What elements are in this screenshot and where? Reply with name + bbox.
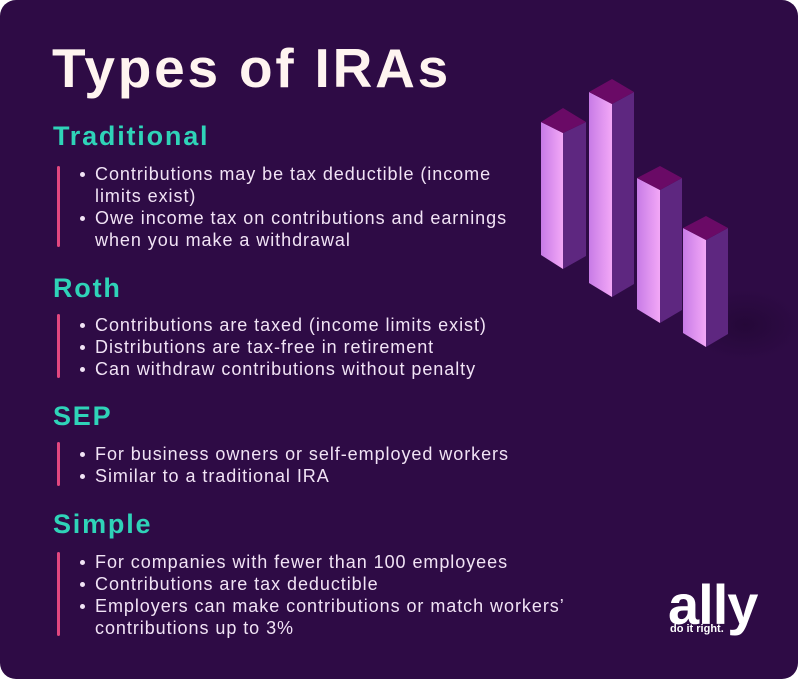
bar 3 <box>637 166 682 323</box>
bar 4 <box>683 216 728 347</box>
list: Simple <box>80 552 565 638</box>
list: Traditional: when you make a withdrawal <box>95 230 351 250</box>
logo: ally: ally <box>668 573 757 636</box>
list: Traditional: Owe income tax on contributions and earnings <box>95 208 507 228</box>
accent bar: Simple <box>57 552 60 636</box>
heading: Traditional: Traditional <box>53 121 209 151</box>
heading: SEP: SEP <box>53 401 112 431</box>
list: Roth <box>80 315 487 379</box>
list: Roth: Distributions are tax-free in retirement <box>95 337 434 357</box>
heading: Roth: Roth <box>53 273 122 303</box>
list: Simple: contributions up to 3% <box>95 618 294 638</box>
list: Roth: Can withdraw contributions without penalty <box>95 359 476 379</box>
list: Traditional: Contributions may be tax deductible (income <box>95 164 491 184</box>
accent bar: Traditional <box>57 166 60 247</box>
logo: ally: do it right. <box>670 623 724 635</box>
list: SEP <box>80 444 509 486</box>
bar 1 <box>541 108 586 269</box>
list: Traditional: limits exist) <box>95 186 196 206</box>
accent bar: SEP <box>57 442 60 486</box>
bar 2 <box>589 79 634 297</box>
heading: Simple: Simple <box>53 509 152 539</box>
title: Types of IRAs <box>52 37 451 99</box>
list: Simple: Contributions are tax deductible <box>95 574 379 594</box>
list: SEP: Similar to a traditional IRA <box>95 466 330 486</box>
list: SEP: For business owners or self-employed workers <box>95 444 509 464</box>
list: Roth: Contributions are taxed (income limits exist) <box>95 315 487 335</box>
accent bar: Roth <box>57 314 60 378</box>
list: Simple: Employers can make contributions or match workers’ <box>95 596 565 616</box>
list: Traditional <box>80 164 507 250</box>
list: Simple: For companies with fewer than 100 employees <box>95 552 508 572</box>
